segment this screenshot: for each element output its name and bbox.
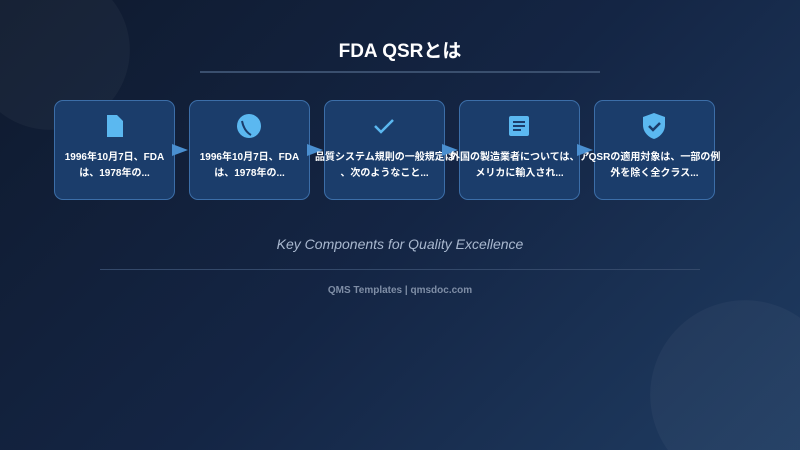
- card 4: [459, 100, 580, 200]
- arrow 4: [577, 144, 593, 156]
- text 3: [315, 151, 455, 179]
- subtitle: Key Components for Quality Excellence: [277, 236, 523, 252]
- footer: QMS Templates | qmsdoc.com: [328, 285, 472, 296]
- arrow 1: [172, 144, 188, 156]
- icon: circle: [237, 114, 261, 138]
- title: FDA QSRとは: [339, 41, 461, 62]
- arrow 2: [307, 144, 323, 156]
- text 2: 1996年10月7日、FDA: [200, 152, 299, 163]
- text 4: 外国の製造業者については、ア: [450, 152, 590, 163]
- text 5: 外を除く全クラス...: [610, 168, 699, 179]
- card 5: [594, 100, 715, 200]
- text 3: 、次のようなこと...: [340, 168, 429, 179]
- text 1: [65, 151, 164, 179]
- text 4: メリカに輸入され...: [475, 168, 564, 179]
- text 2: [200, 151, 299, 179]
- card 1: [54, 100, 175, 200]
- icon: document: [107, 115, 123, 137]
- text 4: [450, 151, 590, 179]
- text 5: QSRの適用対象は、一部の例: [589, 152, 720, 163]
- card 2: [189, 100, 310, 200]
- text 1: は、1978年の...: [79, 168, 150, 179]
- icon: check: [374, 119, 394, 134]
- text 5: [589, 151, 720, 179]
- text 3: 品質システム規則の一般規定は: [315, 152, 455, 163]
- icon: list: [509, 116, 529, 136]
- text 2: は、1978年の...: [214, 168, 285, 179]
- text 1: 1996年10月7日、FDA: [65, 152, 164, 163]
- card 3: [324, 100, 445, 200]
- icon: shield: [643, 113, 665, 139]
- arrow 3: [442, 144, 458, 156]
